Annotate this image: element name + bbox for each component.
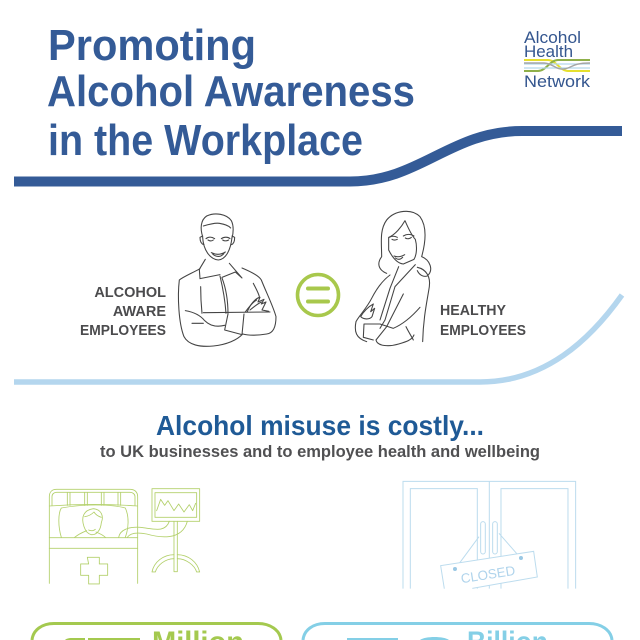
section heading: Alcohol misuse is costly... bbox=[156, 410, 484, 441]
panel: million statistic bbox=[32, 624, 281, 640]
logo: Alcohol Health Network: Alcohol bbox=[524, 28, 581, 47]
label: healthy employees: EMPLOYEES bbox=[440, 323, 526, 339]
label: alcohol aware employees: ALCOHOL bbox=[94, 285, 166, 301]
label: healthy employees: HEALTHY bbox=[440, 303, 506, 319]
label: alcohol aware employees: AWARE bbox=[113, 304, 166, 320]
logo: Alcohol Health Network: Health bbox=[524, 42, 573, 61]
title: in the Workplace bbox=[48, 116, 363, 165]
sign text: closed: CLOSED bbox=[460, 563, 516, 586]
label: healthy employees bbox=[440, 303, 526, 339]
icon: equals sign in circle bbox=[298, 274, 338, 316]
logo: Alcohol Health Network: Network bbox=[524, 72, 591, 91]
icon: hospital bed and heart monitor bbox=[49, 489, 200, 584]
label: alcohol aware employees bbox=[80, 285, 166, 339]
panel: billion statistic bbox=[303, 624, 612, 640]
section subheading: to UK businesses and to employee health and wellbeing bbox=[100, 443, 540, 461]
dark blue curve divider bbox=[14, 131, 622, 182]
icon: man with folded arms bbox=[178, 214, 276, 346]
icon: closed shop doors bbox=[403, 481, 576, 589]
label: alcohol aware employees: EMPLOYEES bbox=[80, 323, 166, 339]
logo: Alcohol Health Network bbox=[524, 28, 591, 91]
title: Alcohol Awareness bbox=[47, 67, 415, 116]
light blue curve divider bbox=[14, 295, 622, 382]
icon: woman with folded arms bbox=[355, 211, 431, 346]
title bbox=[47, 21, 415, 165]
title: Promoting bbox=[48, 21, 256, 70]
